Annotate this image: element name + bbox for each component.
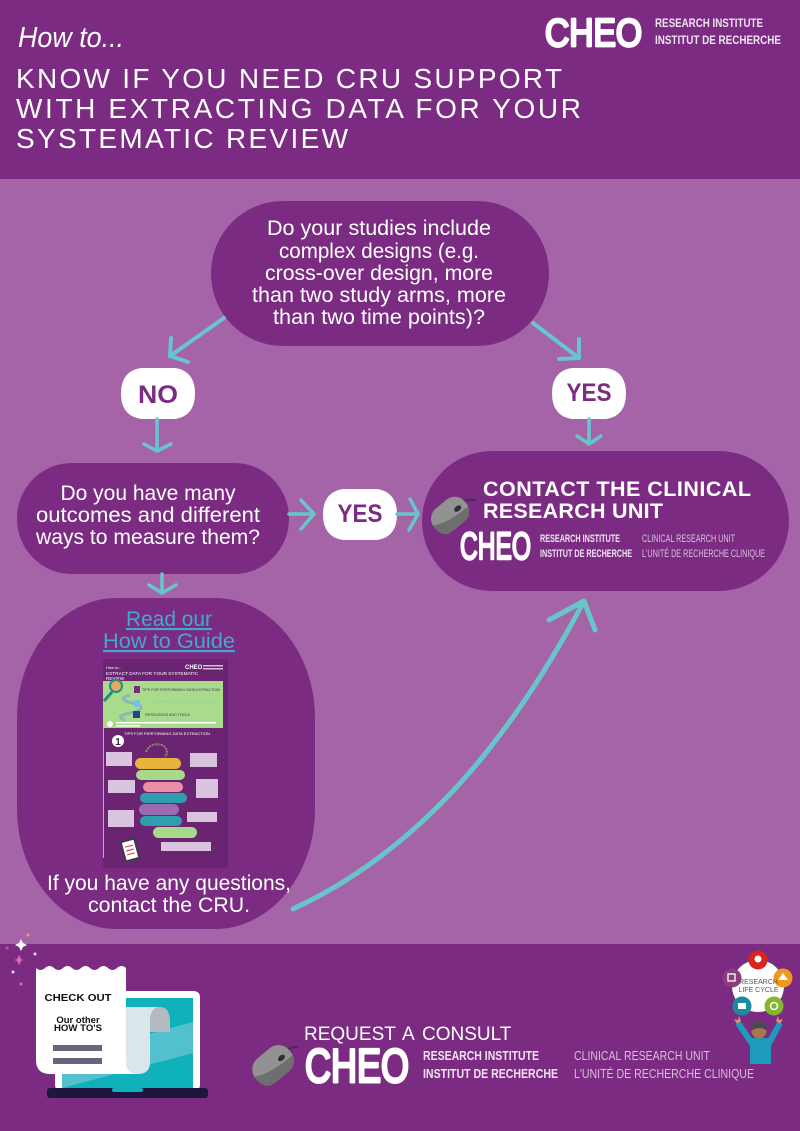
title (16, 63, 581, 154)
footer band (0, 944, 800, 1131)
guide thumbnail: CHOOSING DATA EXTRACTION TOOLS (152, 700, 218, 704)
decision: complex designs: cross-over design, more (265, 262, 493, 285)
YES badge top: YES (566, 379, 612, 407)
arrow: outcomes to YES (289, 500, 314, 529)
how to label: How to... (18, 22, 124, 54)
guide thumbnail: How to... (106, 665, 122, 670)
arrow: NO down (144, 419, 171, 451)
guide thumbnail: 1 (115, 737, 121, 748)
illustration: check out laptop: HOW TO'S (54, 1023, 102, 1034)
illustration: research life cycle: RESEARCH (739, 979, 778, 986)
request a consult: L'UNITÉ DE RECHERCHE CLINIQUE (574, 1066, 754, 1081)
guide thumbnail (103, 659, 228, 868)
YES badge top (552, 368, 626, 419)
CHEO logo header (545, 12, 781, 55)
decision: complex designs: than two time points)? (273, 306, 485, 329)
CHEO logo: CHEO (305, 1039, 409, 1092)
sparkles (6, 934, 36, 986)
panel: contact the clinical research unit: CLINICAL RESEARCH UNIT (642, 533, 735, 545)
decision: outcomes (17, 463, 289, 574)
request a consult: A (402, 1024, 415, 1045)
illustration: check out laptop: Our other (56, 1015, 100, 1026)
contact heading: CONTACT THE CLINICAL (483, 477, 751, 501)
decision: outcomes: outcomes and different (36, 504, 260, 527)
request a consult: REQUEST (304, 1024, 396, 1045)
request a consult: INSTITUT DE RECHERCHE (423, 1067, 558, 1081)
decision: outcomes: Do you have many (60, 482, 236, 505)
illustration: check out laptop (36, 966, 208, 1098)
illustration: research life cycle: LIFE CYCLE (738, 987, 779, 994)
icon: mouse (247, 1039, 299, 1091)
contact text: If you have any questions, (47, 872, 291, 895)
guide thumbnail: TIPS FOR PERFORMING DATA EXTRACTION (142, 688, 220, 692)
request a consult: CLINICAL RESEARCH UNIT (574, 1049, 710, 1063)
decision: complex designs: Do your studies include (267, 217, 491, 240)
request a consult (247, 1024, 754, 1092)
panel: contact the clinical research unit: INSTITUT DE RECHERCHE (540, 548, 632, 560)
CHEO logo: CHEO (460, 526, 531, 568)
icon: mouse (426, 491, 475, 539)
panel: read our how to guide (17, 598, 315, 929)
panel: contact the clinical research unit: RESEARCH INSTITUTE (540, 533, 620, 545)
title: KNOW IF YOU NEED CRU SUPPORT (16, 63, 562, 94)
decision: complex designs: than two study arms, more (252, 284, 506, 307)
guide thumbnail: EXTRACT DATA FOR YOUR SYSTEMATIC (106, 671, 199, 676)
panel: contact the clinical research unit (422, 451, 789, 591)
CHEO logo header: RESEARCH INSTITUTE (655, 16, 763, 30)
NO badge (121, 368, 195, 419)
title: WITH EXTRACTING DATA FOR YOUR (16, 93, 581, 124)
guide thumbnail: RESOURCES AND TOOLS (145, 713, 190, 717)
contact heading: RESEARCH UNIT (483, 499, 663, 523)
request a consult: RESEARCH INSTITUTE (423, 1049, 539, 1063)
decision: outcomes: ways to measure them? (35, 526, 260, 549)
arrow: curved to contact (293, 601, 595, 909)
contact text (47, 872, 291, 917)
decision: complex designs (211, 201, 549, 346)
illustration: research life cycle (722, 950, 792, 1064)
arrow: to YES (533, 323, 579, 359)
arrow: YES down (577, 419, 601, 444)
request a consult: CONSULT (422, 1024, 512, 1045)
guide link: How to Guide (103, 630, 235, 653)
arrow: outcomes down (149, 574, 176, 593)
illustration: check out laptop: CHECK OUT (44, 992, 112, 1004)
YES badge middle: YES (338, 500, 382, 528)
decision: complex designs: complex designs (e.g. (279, 240, 479, 263)
header band (0, 0, 800, 179)
guide link (103, 608, 235, 653)
arrow: YES to contact (397, 499, 418, 530)
title: SYSTEMATIC REVIEW (16, 123, 349, 154)
contact text: contact the CRU. (88, 894, 250, 917)
YES badge middle (323, 489, 397, 540)
guide link: Read our (126, 608, 212, 631)
guide thumbnail: CHEO (185, 665, 203, 671)
arrow: to NO (170, 318, 224, 362)
NO badge: NO (138, 381, 178, 409)
CHEO logo header: CHEO (545, 12, 642, 55)
guide thumbnail: TIPS FOR PERFORMING DATA EXTRACTION (124, 732, 210, 736)
guide thumbnail: REVIEW (106, 676, 125, 681)
contact heading (483, 477, 751, 523)
